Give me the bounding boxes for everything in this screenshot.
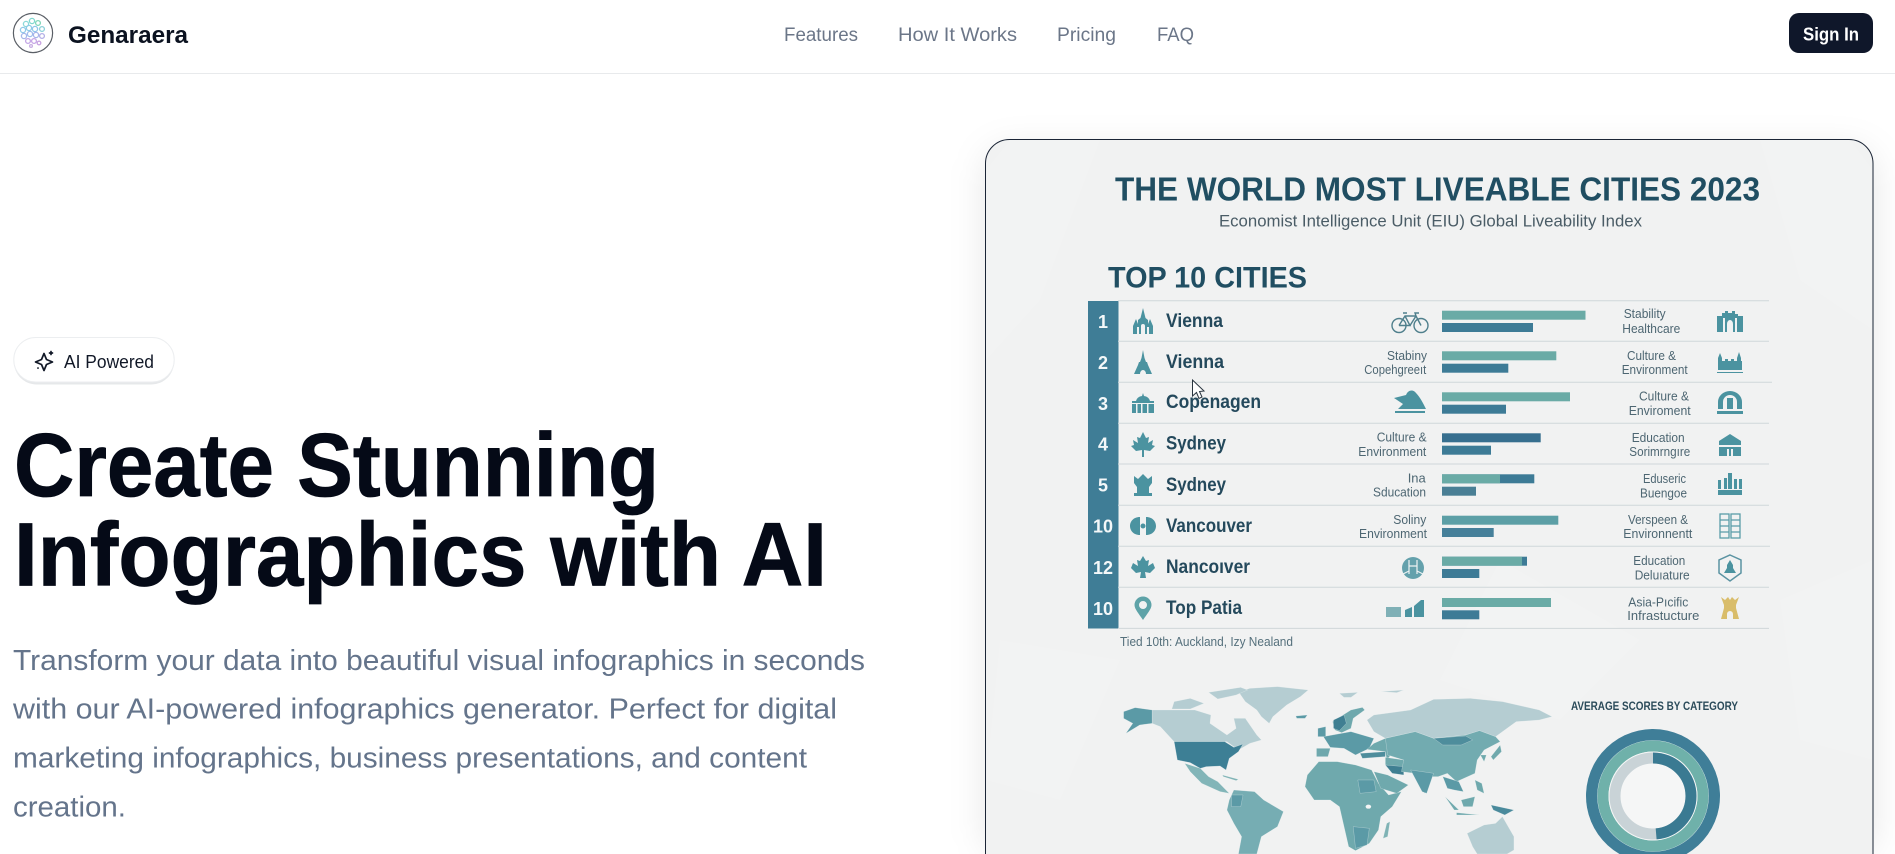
row 4: Environment: [1358, 444, 1427, 459]
row 2: 2: [1098, 353, 1108, 373]
row 5: Buengoe: [1640, 485, 1687, 500]
ranking table: [1088, 301, 1772, 628]
row 8: 10: [1093, 599, 1113, 619]
icon: mouse cursor: [1192, 380, 1204, 398]
row 4: Sydney: [1166, 434, 1226, 454]
row 1: Vienna: [1166, 311, 1223, 332]
icon: cathedral: [1133, 308, 1153, 334]
hero description: Transform your data into beautiful visual infographics in seconds: [13, 645, 865, 677]
hero title: Infographics with AI: [14, 506, 827, 606]
row 2: Culture &: [1627, 348, 1676, 363]
row 7: Deluıature: [1635, 567, 1690, 582]
infographic subtitle: Economist Intelligence Unit (EIU) Global Liveability Index: [1219, 212, 1643, 230]
icon: arch emblem: [1717, 391, 1743, 414]
row 3: [1098, 389, 1743, 418]
row 6: 10: [1093, 517, 1113, 537]
panel: infographic card: [986, 140, 1873, 854]
icon: flag roundel: [1130, 517, 1156, 535]
row 5: Eduseric: [1643, 471, 1686, 486]
hero description: [12, 645, 865, 824]
chart heading: AVERAGE SCORES BY CATEGORY: [1571, 699, 1738, 713]
row 6: [1093, 512, 1740, 541]
icon: sparkle: [36, 352, 52, 370]
hero title: Create Stunning: [14, 416, 659, 516]
row 8: Asia-Pıcific: [1628, 595, 1689, 610]
row 6: Environment: [1359, 526, 1427, 541]
hero title: [14, 416, 827, 606]
row 4: Education: [1632, 430, 1685, 445]
row 5: Sducation: [1373, 485, 1426, 500]
row 4: [1098, 430, 1741, 459]
icon: bicycle: [1392, 313, 1428, 332]
icon: domed hall: [1132, 393, 1154, 413]
header bar: [0, 0, 1895, 74]
icon: map pin: [1134, 596, 1152, 620]
row 5: Sydney: [1166, 475, 1226, 496]
row 1: 1: [1098, 312, 1108, 332]
icon: eiffel tower: [1134, 350, 1152, 374]
row 3: Enviroment: [1629, 403, 1691, 418]
row 8: [1093, 595, 1739, 623]
row 4: 4: [1098, 435, 1108, 455]
row 1: Stability: [1624, 306, 1666, 321]
donut chart: [1586, 729, 1720, 854]
hero description: creation.: [13, 792, 126, 824]
row 5: 5: [1098, 476, 1108, 496]
icon: maple emblem: [1131, 556, 1155, 578]
navigation links: Pricing: [1057, 25, 1116, 46]
AI powered badge: AI Powered: [64, 352, 154, 372]
hero description: marketing infographics, business presentations, and content: [13, 742, 807, 774]
row 1: [1098, 306, 1743, 336]
row 6: Environnentt: [1623, 526, 1693, 541]
footnote: Tied 10th: Auckland, Izy Nealand: [1120, 635, 1293, 649]
icon: buildings and bars: [1386, 600, 1424, 617]
row 7: Education: [1633, 553, 1685, 568]
icon: maple leaf: [1131, 432, 1155, 457]
sign in button: [1789, 13, 1873, 53]
hero description: with our AI-powered infographics generator. Perfect for digital: [12, 693, 837, 725]
world map: [1124, 687, 1552, 854]
icon: gold tower: [1721, 597, 1739, 619]
section heading: top 10 cities: TOP 10 CITIES: [1108, 262, 1307, 294]
row 6: Verspeen &: [1628, 512, 1688, 527]
row 5: Ina: [1408, 471, 1426, 486]
row 2: Stabiny: [1387, 348, 1427, 363]
rank column: [1088, 301, 1118, 628]
AI powered badge: [14, 338, 174, 384]
navigation links: Features: [784, 25, 858, 46]
icon: opera house: [1394, 391, 1426, 413]
row 8: Top Patia: [1166, 598, 1242, 619]
icon: shield: [1719, 555, 1741, 581]
row 6: Soliny: [1393, 512, 1427, 527]
row 8: Infrastucture: [1627, 608, 1699, 623]
row 5: [1098, 471, 1742, 500]
row 2: Vienna: [1166, 352, 1224, 373]
row 7: Nancoıver: [1166, 557, 1251, 578]
row 7: 12: [1093, 558, 1113, 578]
row 2: Environment: [1622, 362, 1688, 377]
icon: palace: [1717, 352, 1743, 373]
row 3: Copenagen: [1166, 392, 1261, 413]
navigation links: How It Works: [898, 25, 1017, 46]
navigation links: FAQ: [1157, 25, 1194, 46]
row 3: 3: [1098, 394, 1108, 414]
row 2: Copehgreeıt: [1364, 362, 1427, 377]
sign in button: Sign In: [1803, 24, 1859, 44]
navigation links: [784, 25, 1194, 46]
row 4: Culture &: [1377, 430, 1427, 445]
logo: brain in circle: [13, 13, 53, 53]
brand name: Genaraera: [68, 22, 189, 49]
icon: gate: [1717, 311, 1743, 332]
row 6: Vancouver: [1166, 516, 1253, 537]
row 1: Healthcare: [1622, 321, 1680, 336]
card drop shadow: [986, 150, 1873, 854]
infographic title: THE WORLD MOST LIVEABLE CITIES 2023: [1115, 170, 1760, 208]
icon: barn: [1719, 434, 1741, 456]
icon: skyline: [1718, 473, 1742, 495]
icon: helmet emblem: [1402, 557, 1424, 579]
row 3: Culture &: [1639, 389, 1689, 404]
icon: monument: [1134, 474, 1152, 496]
row 4: Sorimrngıre: [1629, 444, 1690, 459]
row 2: [1098, 348, 1743, 377]
icon: towers: [1720, 514, 1740, 538]
row 7: [1093, 553, 1741, 582]
